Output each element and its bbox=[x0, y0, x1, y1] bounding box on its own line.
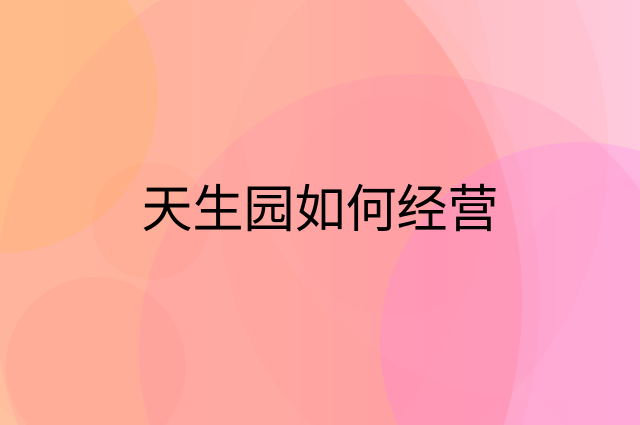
title: 天生园如何经营 bbox=[141, 181, 498, 238]
